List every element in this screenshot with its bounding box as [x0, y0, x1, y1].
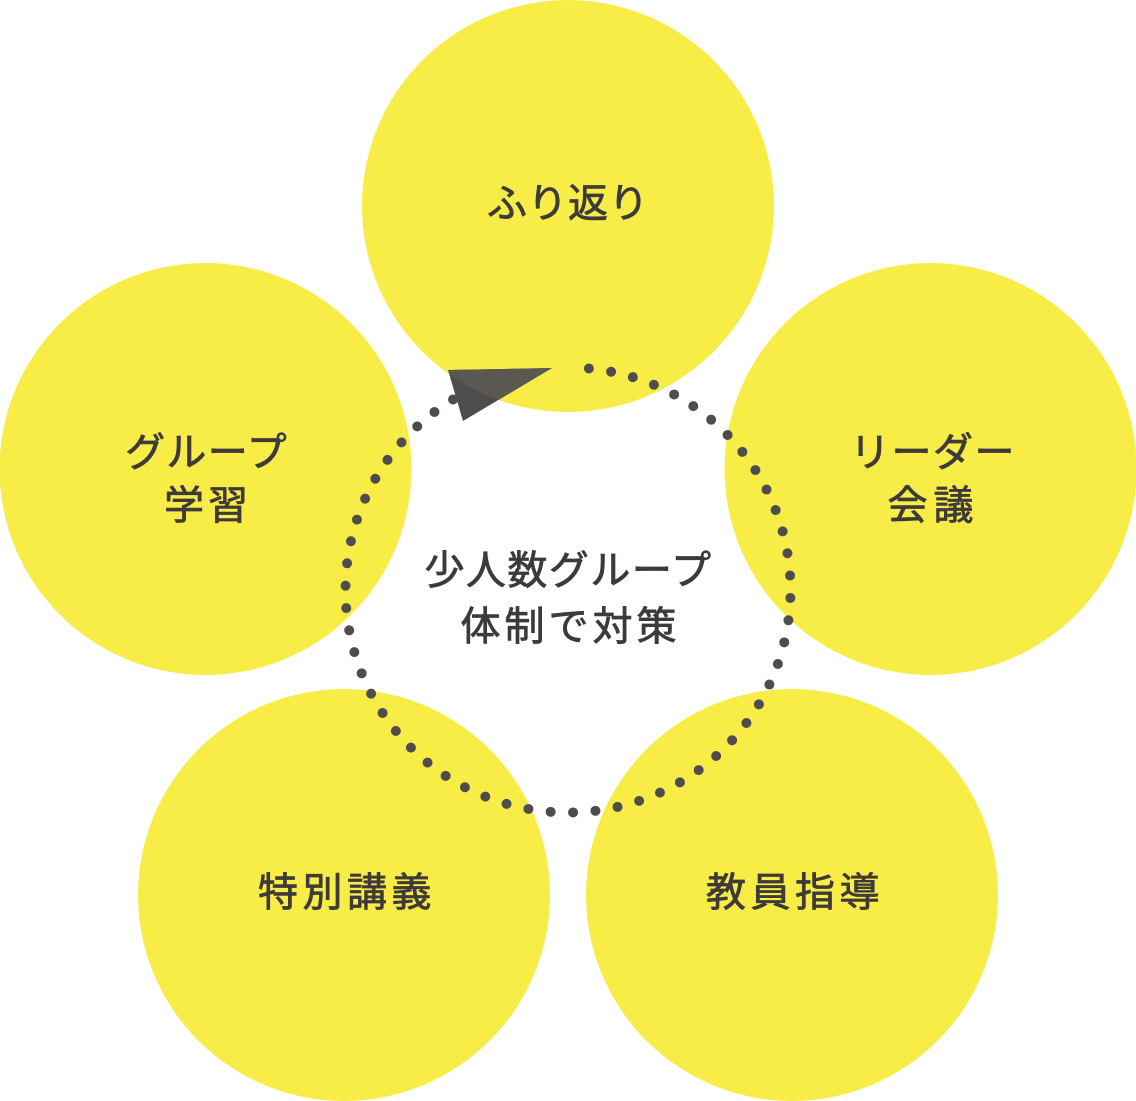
label: グループ学習: 学習	[164, 484, 252, 528]
label: グループ学習: グループ	[125, 431, 288, 475]
label: 教員指導: 教員指導	[706, 871, 884, 915]
circle: ふり返り	[362, 0, 774, 412]
center text: 少人数グループ	[424, 549, 713, 593]
arrowhead	[448, 368, 552, 421]
center text: 体制で対策	[460, 605, 680, 649]
label: ふり返り: ふり返り	[487, 182, 649, 226]
label: リーダー会議: 会議	[888, 484, 980, 528]
circle: 教員指導	[586, 689, 998, 1101]
label: リーダー会議: リーダー	[850, 431, 1016, 475]
dotted cycle ring	[346, 368, 791, 813]
circle: 特別講義	[138, 689, 550, 1101]
circle: リーダー会議	[724, 263, 1136, 675]
circle: グループ学習	[0, 263, 412, 675]
label: 特別講義: 特別講義	[258, 871, 436, 915]
